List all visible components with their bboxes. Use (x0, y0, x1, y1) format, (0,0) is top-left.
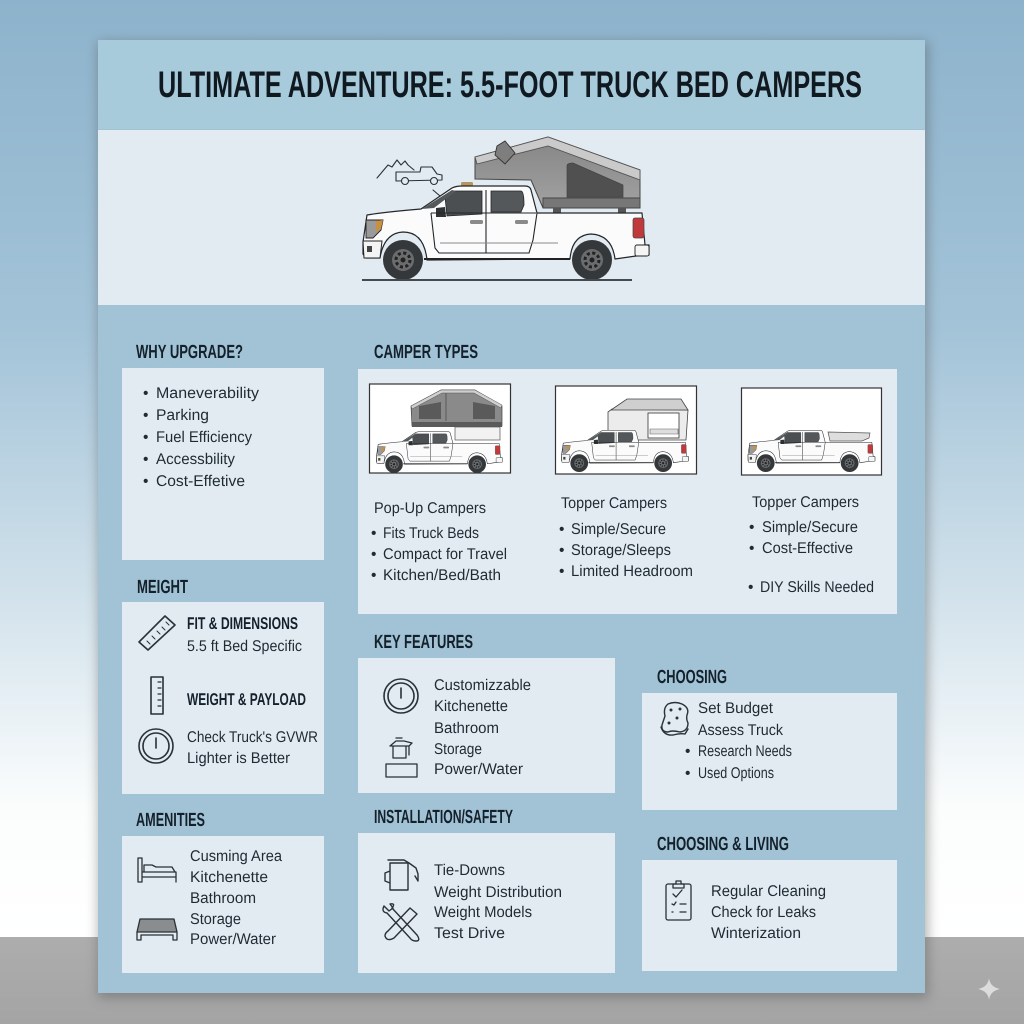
column: topper campers 2: • (749, 519, 754, 536)
text: fit and dimensions: FIT & DIMENSIONS (187, 614, 298, 633)
thumbnail: flat topper (742, 388, 882, 475)
panel shadow (98, 42, 928, 998)
column: topper campers: Storage/Sleeps (571, 542, 671, 559)
list: Parking (156, 407, 209, 424)
list: Kitchenette (190, 869, 268, 886)
list: • (143, 473, 148, 490)
list (190, 848, 282, 948)
column: topper campers: • (559, 521, 564, 538)
panel: weight (122, 577, 324, 794)
list: • (143, 385, 148, 402)
list: Set Budget (698, 700, 774, 717)
list: Cusming Area (190, 848, 282, 865)
heading: AMENITIES (136, 810, 205, 831)
column: topper campers 2: DIY Skills Needed (760, 579, 874, 596)
panel: installation and safety (358, 807, 615, 973)
icon: jug (385, 860, 418, 890)
column: pop-up campers: Pop-Up Campers (374, 500, 486, 517)
title band (98, 40, 925, 129)
column: topper campers: Topper Campers (561, 495, 667, 512)
panel: key features (358, 632, 615, 793)
icon: wrench and screwdriver (383, 904, 419, 941)
column: pop-up campers: • (371, 525, 376, 542)
column: topper campers 2: Simple/Secure (762, 519, 858, 536)
icon: bed (138, 858, 176, 882)
icon: vertical ruler (151, 677, 163, 714)
column: topper campers (559, 495, 693, 580)
heading: CAMPER TYPES (374, 342, 478, 363)
column: topper campers: Limited Headroom (571, 563, 693, 580)
list: Winterization (711, 925, 801, 942)
icon: kettle and box (386, 738, 417, 777)
list: Regular Cleaning (711, 883, 826, 900)
ground line (362, 279, 632, 281)
icon: gauge (139, 729, 173, 763)
heading: CHOOSING (657, 667, 727, 688)
list: Check for Leaks (711, 904, 816, 921)
column: topper campers 2: Topper Campers (752, 494, 859, 511)
list: • (143, 407, 148, 424)
list: Test Drive (434, 925, 505, 942)
list: Maneverability (156, 385, 259, 402)
list: Accessbility (156, 451, 235, 468)
text: weight notes: Lighter is Better (187, 750, 290, 767)
list: Used Options (698, 765, 774, 782)
heading: MEIGHT (137, 577, 188, 598)
icon: sponge (661, 702, 688, 735)
text: weight notes (187, 729, 318, 767)
list: Assess Truck (698, 722, 783, 739)
floor band (0, 937, 1024, 1024)
main sheet (98, 40, 925, 993)
list: Weight Distribution (434, 884, 562, 901)
list (685, 700, 792, 782)
icon: sparkle (978, 978, 1000, 1000)
panel: choosing and living (642, 834, 897, 971)
list: Cost-Effetive (156, 473, 245, 490)
list: Bathroom (434, 720, 499, 737)
list: Bathroom (190, 890, 256, 907)
text: fit and dimensions: 5.5 ft Bed Specific (187, 638, 302, 655)
list: Customizzable (434, 677, 531, 694)
column: topper campers 2: Cost-Effective (762, 540, 853, 557)
text: fit and dimensions (187, 614, 302, 655)
list: Power/Water (434, 761, 523, 778)
column: pop-up campers: Kitchen/Bed/Bath (383, 567, 501, 584)
list: Research Needs (698, 743, 792, 760)
heading: WHY UPGRADE? (136, 342, 243, 363)
list (711, 883, 826, 942)
column: topper campers 2: • (749, 540, 754, 557)
column: topper campers: • (559, 542, 564, 559)
list: Fuel Efficiency (156, 429, 252, 446)
list (434, 677, 531, 778)
column: topper campers: Simple/Secure (571, 521, 666, 538)
heading: KEY FEATURES (374, 632, 473, 653)
column: topper campers: • (559, 563, 564, 580)
list: • (143, 451, 148, 468)
panel: camper types (358, 342, 897, 614)
list: • (685, 765, 690, 782)
panel: amenities (122, 810, 324, 973)
heading: weight and payload: WEIGHT & PAYLOAD (187, 690, 306, 709)
list: Kitchenette (434, 698, 508, 715)
icon: platform (137, 919, 177, 940)
column: pop-up campers: • (371, 567, 376, 584)
list: Weight Models (434, 904, 532, 921)
column: topper campers 2: • (748, 579, 753, 596)
thumbnail: topper camper with bed (556, 386, 696, 474)
icon: ruler (139, 616, 175, 650)
icon: mountain and small truck (377, 160, 442, 196)
column: topper campers 2 (748, 494, 874, 596)
column: pop-up campers (371, 500, 507, 584)
icon: gauge (384, 679, 418, 713)
column: pop-up campers: • (371, 546, 376, 563)
text: weight notes: Check Truck's GVWR (187, 729, 318, 746)
list: Storage (190, 911, 241, 928)
list: Power/Water (190, 931, 276, 948)
illustration: pop-up camper (475, 137, 640, 213)
list (143, 385, 259, 490)
list: Tie-Downs (434, 862, 505, 879)
heading: INSTALLATION/SAFETY (374, 807, 513, 828)
panel: why upgrade (122, 342, 324, 560)
list: • (143, 429, 148, 446)
illustration: white pickup truck (362, 182, 649, 281)
icon: checklist (666, 881, 691, 920)
column: pop-up campers: Fits Truck Beds (383, 525, 479, 542)
list: • (685, 743, 690, 760)
heading: CHOOSING & LIVING (657, 834, 789, 855)
thumbnail: pop-up camper (370, 384, 510, 473)
hero band (98, 130, 925, 305)
column: pop-up campers: Compact for Travel (383, 546, 507, 563)
list (434, 862, 562, 942)
list: Storage (434, 741, 482, 758)
panel: choosing (642, 667, 897, 810)
